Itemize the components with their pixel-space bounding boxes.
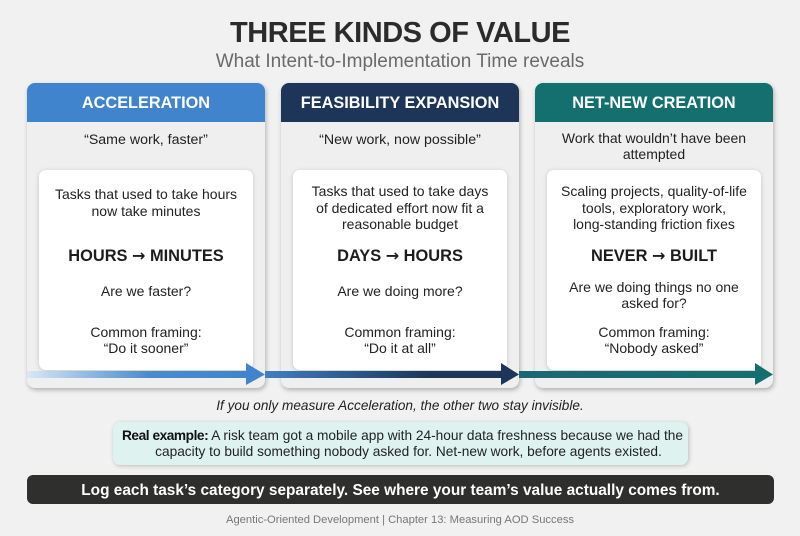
net-new description: tools, exploratory work, bbox=[582, 200, 726, 216]
net-new question bbox=[569, 278, 739, 311]
feasibility question: Are we doing more? bbox=[337, 283, 463, 299]
net-new shift: NEVER → BUILT bbox=[591, 246, 717, 265]
callout: real example: Real example: A risk team got a mobile app with 24-hour data freshness because we had the bbox=[122, 428, 683, 443]
acceleration header bbox=[27, 83, 265, 122]
arrow: net-new bbox=[519, 363, 773, 385]
title: THREE KINDS OF VALUE bbox=[230, 17, 570, 49]
callout: real example bbox=[113, 422, 688, 465]
acceleration description: Tasks that used to take hours bbox=[55, 186, 237, 202]
acceleration framing: “Do it sooner” bbox=[104, 340, 188, 356]
panel: acceleration bbox=[27, 83, 265, 388]
feasibility description: reasonable budget bbox=[342, 216, 458, 232]
feasibility framing bbox=[344, 324, 456, 356]
net-new question: Are we doing things no one bbox=[569, 278, 739, 294]
acceleration detail box bbox=[39, 170, 253, 370]
net-new framing: “Nobody asked” bbox=[605, 340, 703, 356]
feasibility header bbox=[281, 83, 519, 122]
subtitle: What Intent-to-Implementation Time reveals bbox=[216, 51, 584, 72]
acceleration description bbox=[55, 186, 237, 218]
banner: takeaway: Log each task’s category separately. See where your team’s value actually comes from. bbox=[81, 482, 720, 499]
feasibility shift: DAYS → HOURS bbox=[337, 246, 463, 265]
feasibility description bbox=[312, 183, 488, 232]
arrow: acceleration bbox=[27, 363, 265, 385]
arrows: value progression bbox=[27, 363, 773, 385]
acceleration tagline: “Same work, faster” bbox=[84, 132, 208, 148]
feasibility description: of dedicated effort now fit a bbox=[316, 200, 484, 216]
net-new header: NET-NEW CREATION bbox=[572, 94, 736, 112]
callout: real example: capacity to build something nobody asked for. Net-new work, before agents existed. bbox=[155, 444, 662, 459]
net-new tagline bbox=[562, 130, 746, 162]
acceleration header: ACCELERATION bbox=[82, 94, 210, 112]
feasibility header: FEASIBILITY EXPANSION bbox=[301, 94, 499, 112]
acceleration question: Are we faster? bbox=[101, 283, 191, 299]
net-new framing bbox=[598, 324, 710, 356]
acceleration framing bbox=[90, 324, 202, 356]
banner: takeaway bbox=[27, 475, 774, 504]
net-new tagline: Work that wouldn’t have been bbox=[562, 130, 746, 146]
net-new framing: Common framing: bbox=[598, 324, 710, 340]
acceleration shift: HOURS → MINUTES bbox=[68, 246, 224, 265]
panel: feasibility expansion bbox=[281, 83, 519, 388]
net-new header bbox=[535, 83, 773, 122]
feasibility tagline: “New work, now possible” bbox=[319, 132, 481, 148]
note: measurement warning: If you only measure Acceleration, the other two stay invisible. bbox=[216, 398, 584, 413]
net-new description bbox=[561, 183, 747, 232]
arrow: feasibility bbox=[265, 363, 519, 385]
feasibility detail box bbox=[293, 170, 507, 370]
net-new tagline: attempted bbox=[623, 146, 685, 162]
net-new detail box bbox=[547, 170, 761, 370]
feasibility framing: Common framing: bbox=[344, 324, 456, 340]
net-new description: long-standing friction fixes bbox=[573, 216, 735, 232]
footer: Agentic-Oriented Development | Chapter 13: Measuring AOD Success bbox=[226, 514, 574, 526]
panel: net-new creation bbox=[535, 83, 773, 388]
feasibility framing: “Do it at all” bbox=[364, 340, 436, 356]
acceleration framing: Common framing: bbox=[90, 324, 202, 340]
net-new question: asked for? bbox=[621, 295, 687, 311]
net-new description: Scaling projects, quality-of-life bbox=[561, 183, 747, 199]
acceleration description: now take minutes bbox=[92, 202, 200, 218]
feasibility description: Tasks that used to take days bbox=[312, 183, 488, 199]
